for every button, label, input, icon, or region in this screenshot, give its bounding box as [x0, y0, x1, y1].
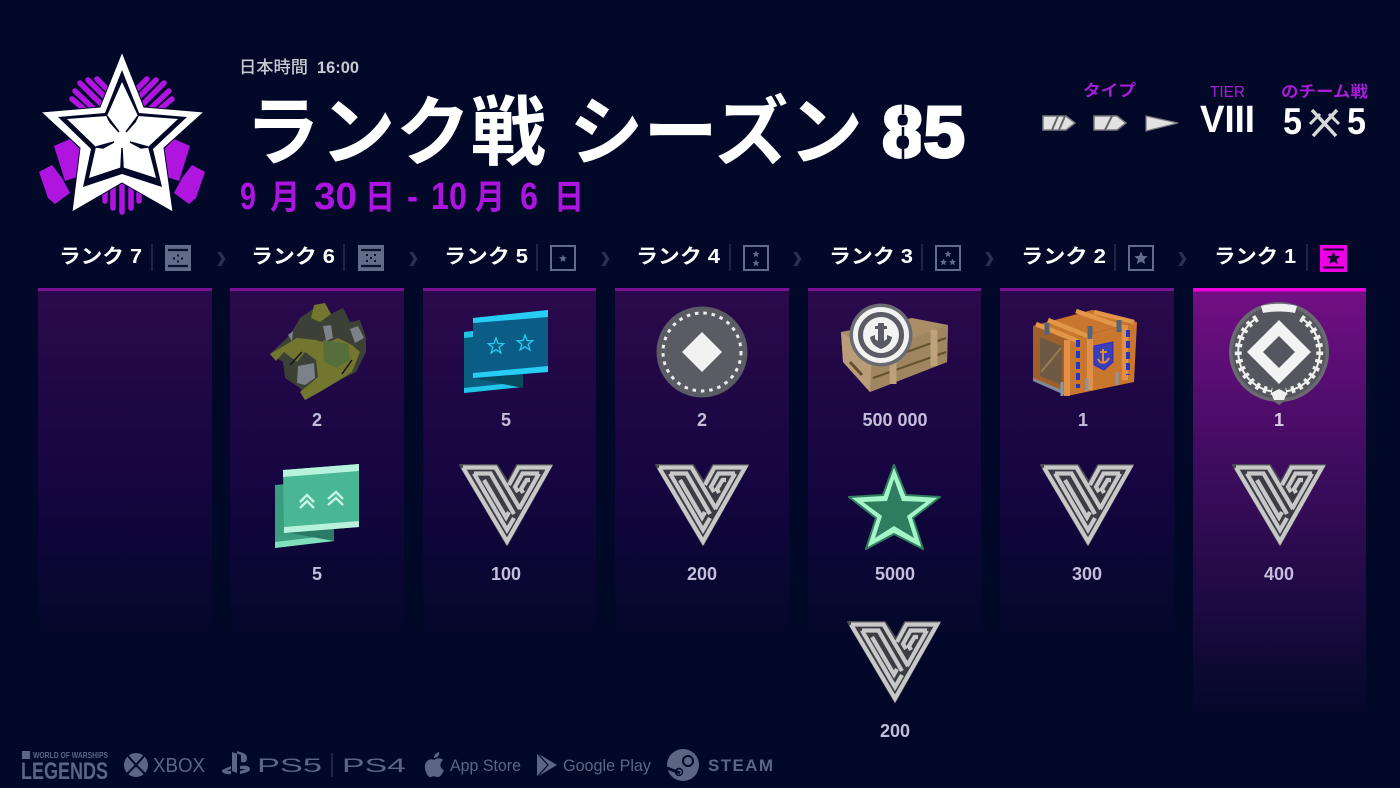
label: 1: 1 [1274, 410, 1284, 430]
time note: 日本時間 [239, 58, 308, 77]
icon: green flags [275, 464, 359, 548]
label: 5: 5 [312, 564, 322, 584]
rank 2 header [1021, 244, 1153, 271]
battle info: type, tier, team size: 5 [1347, 101, 1366, 142]
battle info: type, tier, team size: 5 [1283, 101, 1302, 142]
rank 2 header: ランク 2 [1021, 245, 1106, 268]
label: 5000: 5000 [875, 564, 915, 584]
label: 2: 2 [697, 410, 707, 430]
battle info: type, tier, team size: タイプ [1083, 82, 1136, 100]
rank 7 header [59, 244, 191, 271]
rank 6 header: ランク 6 [251, 245, 335, 268]
icon: V points [656, 465, 748, 545]
date range: 日 [554, 179, 584, 217]
logo: World of Warships Legends [21, 750, 108, 785]
platform logos [21, 749, 773, 785]
icon: patch disc [656, 306, 748, 398]
icon: V points [1233, 465, 1325, 545]
rank 7 header: ランク 7 [59, 245, 142, 268]
date range: 月 [270, 179, 300, 217]
icon: credits crate [841, 304, 948, 392]
rank 4 header [636, 244, 768, 271]
label: 200: 200 [880, 721, 910, 741]
rank 5 header [444, 244, 575, 271]
label: 300: 300 [1072, 564, 1102, 584]
logo: Xbox: XBOX [153, 755, 205, 777]
title [245, 91, 965, 176]
date range: 日 [365, 179, 395, 217]
rank 1 header [1214, 244, 1347, 272]
panel: rank 2 [1000, 288, 1174, 650]
chevron [794, 252, 802, 266]
icon: green star [849, 465, 940, 549]
label: 400: 400 [1264, 564, 1294, 584]
chevron [1178, 252, 1186, 266]
panel: rank 6 [230, 288, 404, 650]
logo: PS5 / PS4: PS5 [257, 755, 322, 777]
rank 5 header: ランク 5 [444, 245, 528, 268]
icon: laurel medal [1229, 302, 1329, 405]
rank 3 header [829, 244, 960, 271]
logo: App Store: App Store [450, 756, 521, 775]
time note: 16:00 [317, 58, 359, 77]
label: 5: 5 [501, 410, 511, 430]
logo: Google Play [537, 753, 651, 777]
title: シーズン [569, 91, 863, 176]
icon: camouflage [270, 303, 366, 400]
date range: 月 [475, 179, 505, 217]
logo: Xbox [124, 753, 205, 777]
battle info: type, tier, team size: のチーム戦 [1281, 82, 1368, 101]
panel: rank 7 [38, 288, 212, 650]
title: 85 [882, 93, 965, 173]
time note [239, 58, 359, 77]
rank 4 header: ランク 4 [636, 245, 721, 268]
label: 200: 200 [687, 564, 717, 584]
chevron [410, 252, 418, 266]
date range: 30 [314, 176, 357, 218]
panel: rank 1 [1193, 288, 1366, 723]
icon: blue flags [464, 310, 548, 393]
chevron [986, 252, 994, 266]
icon: V points [460, 465, 552, 545]
label: 1: 1 [1078, 410, 1088, 430]
battle info: type, tier, team size: TIER [1210, 84, 1245, 101]
logo: PS5 / PS4: PS4 [342, 755, 406, 777]
icon: orange crate [1033, 310, 1137, 396]
label: 2: 2 [312, 410, 322, 430]
rank headers [59, 244, 1347, 272]
logo: rank star emblem [39, 52, 205, 212]
logo: PS5 / PS4 [222, 751, 406, 777]
label: 500 000: 500 000 [862, 410, 928, 430]
rank 1 header: ランク 1 [1214, 245, 1296, 268]
rank 6 header [251, 244, 384, 271]
logo: World of Warships Legends: LEGENDS [21, 758, 108, 785]
logo: Google Play: Google Play [563, 756, 651, 775]
date range [240, 176, 584, 218]
label: 100: 100 [491, 564, 521, 584]
logo: World of Warships Legends: WORLD OF WARSHIPS [33, 750, 108, 760]
battle info: type, tier, team size: VIII [1200, 99, 1255, 141]
logo: Steam [667, 749, 773, 781]
chevron [218, 252, 226, 266]
chevron [602, 252, 610, 266]
panel: rank 4 [615, 288, 789, 650]
date range: 9 [240, 176, 256, 218]
rank 3 header: ランク 3 [829, 245, 913, 268]
icon: V points [848, 622, 940, 702]
title: ランク戦 [245, 91, 546, 176]
panel: rank 5 [423, 288, 596, 650]
date range: - [407, 176, 418, 218]
date range: 10 [431, 176, 467, 218]
battle info: type, tier, team size [1043, 82, 1368, 142]
date range: 6 [520, 176, 538, 218]
panel: rank 3 [808, 288, 981, 741]
icon: V points [1041, 465, 1133, 545]
logo: Steam: STEAM [708, 756, 773, 775]
logo: App Store [425, 752, 521, 777]
